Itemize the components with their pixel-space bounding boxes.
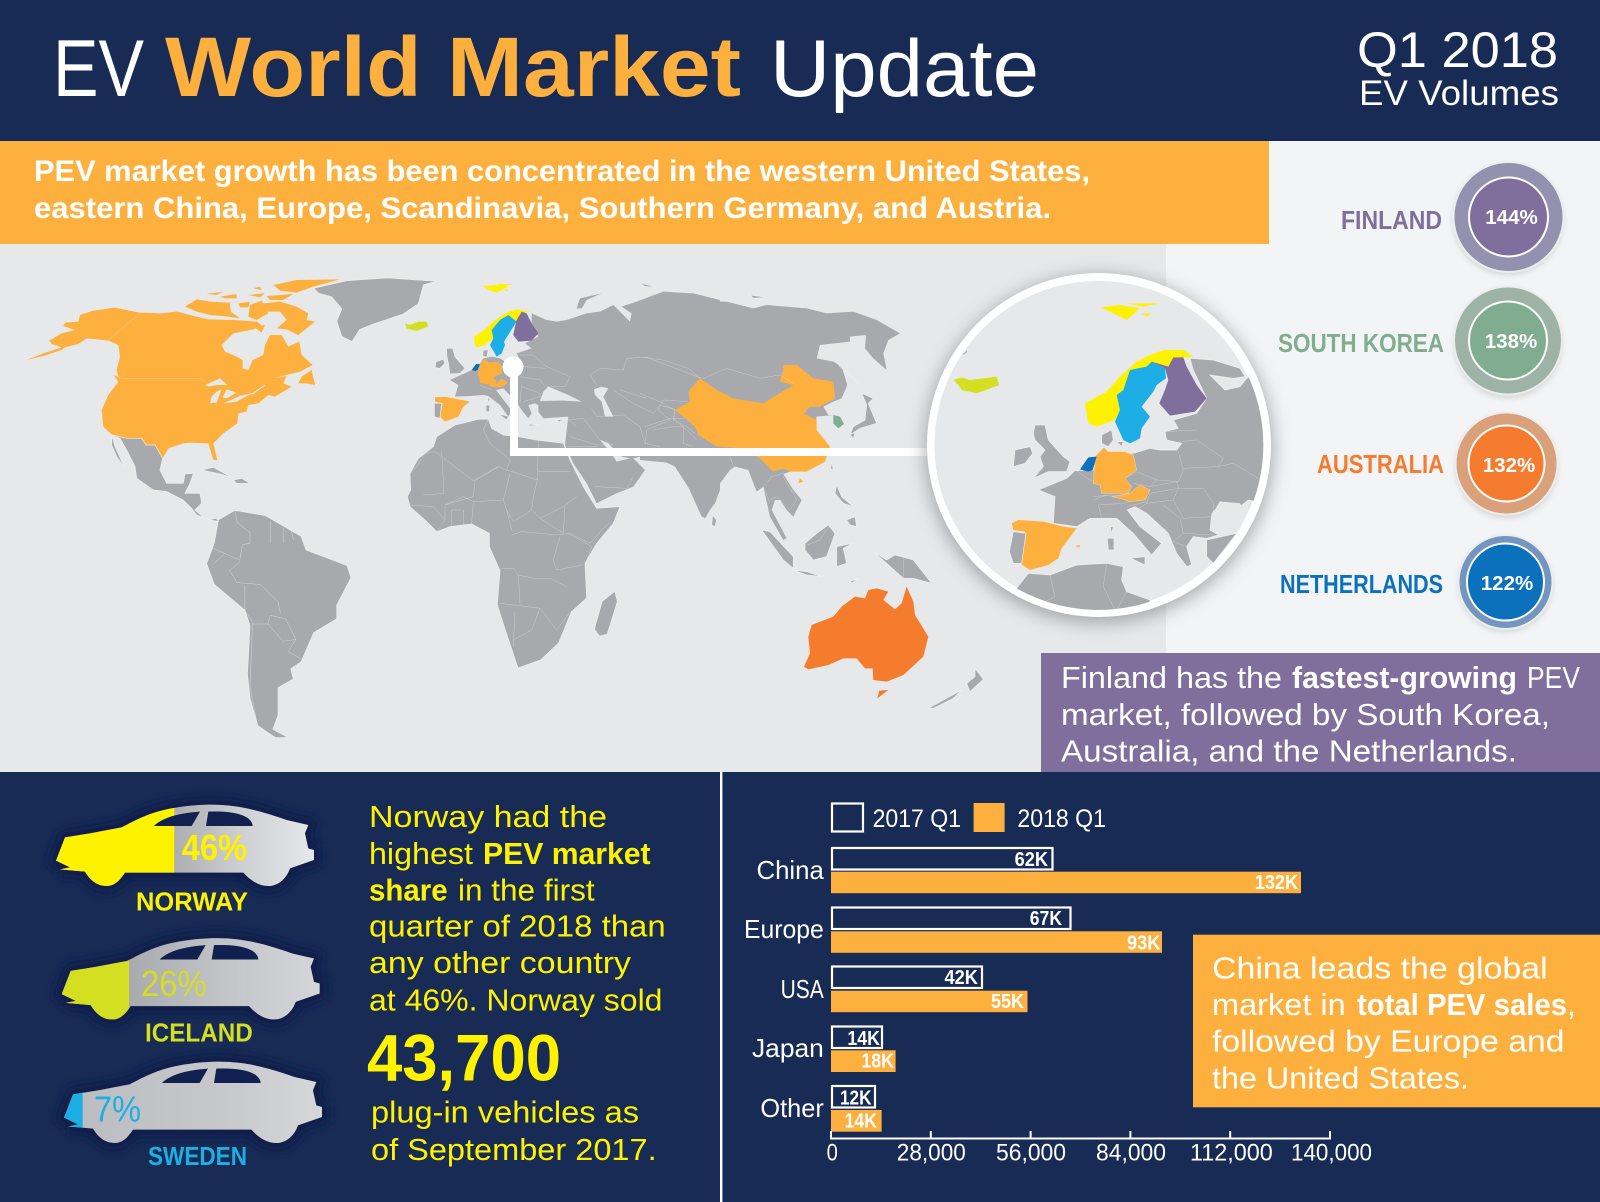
inset ring — [927, 273, 1271, 617]
x axis labels: 28,000 — [897, 1140, 966, 1167]
continental Europe — [1038, 358, 1267, 567]
Anatolia — [1207, 533, 1237, 563]
Netherlands — [472, 364, 480, 371]
South America — [207, 510, 351, 738]
car: Sweden: 7% — [94, 1089, 141, 1130]
callout: China leads global market: followed by Europe and — [1212, 1024, 1564, 1059]
Finland — [1152, 357, 1207, 416]
text block: Norway market share: Norway had the — [369, 799, 607, 834]
region labels — [744, 855, 824, 1123]
bar values: 55K — [991, 991, 1024, 1013]
bar values: 14K — [845, 1111, 877, 1133]
callout: fastest-growing market: fastest-growing — [1292, 660, 1517, 695]
Great Lakes — [205, 378, 253, 403]
arrow: connector from Europe to the inset — [502, 356, 935, 456]
world map — [27, 278, 983, 738]
big number: Norway sales: 43,700 — [367, 1021, 561, 1095]
legend: 2018 Q1 — [1017, 805, 1106, 833]
South America borders — [209, 510, 304, 726]
growth list: South Korea: 138% — [1485, 330, 1537, 353]
Europe and western Asia borders — [480, 355, 702, 488]
Black Sea — [540, 387, 582, 402]
Baja California — [112, 435, 125, 468]
growth list: South Korea — [1278, 286, 1563, 398]
callout: fastest-growing market: market, followed by South Korea, — [1061, 697, 1550, 732]
map: North America — [27, 279, 340, 522]
Iceland — [953, 377, 999, 393]
growth list: Finland: FINLAND — [1341, 205, 1442, 235]
Sweden — [1115, 362, 1166, 443]
Newfoundland — [298, 370, 315, 385]
callout: China leads global market: the United States. — [1212, 1060, 1469, 1095]
panel: market share — [0, 772, 720, 1202]
growth list: Australia — [1317, 412, 1558, 518]
Caspian Sea and Persian Gulf — [594, 387, 613, 417]
eastern Europe borders — [1075, 430, 1258, 547]
callout: China leads global market: total PEV sales — [1357, 987, 1567, 1022]
title — [53, 20, 1039, 114]
callout: China leads global market — [1193, 935, 1600, 1107]
China — [675, 365, 835, 472]
bar values: 18K — [861, 1051, 894, 1073]
Hainan — [798, 478, 803, 483]
car: Iceland: 26% — [141, 963, 207, 1004]
Norway — [474, 309, 530, 347]
callout: China leads global market: China leads the global — [1212, 950, 1548, 985]
x axis labels: 0 — [827, 1140, 838, 1167]
bar values: 14K — [847, 1028, 880, 1050]
map: Greenland, South America and Madagascar — [207, 278, 617, 738]
growth list: Australia: 132% — [1483, 454, 1535, 477]
Black Sea — [1210, 502, 1241, 526]
Austria — [487, 378, 508, 387]
map: Asia landmass — [640, 293, 900, 540]
bar values: 67K — [1030, 908, 1062, 930]
Netherlands — [1080, 457, 1097, 472]
growth list: Finland — [1341, 161, 1564, 275]
Greenland — [314, 278, 436, 342]
bar values: 42K — [944, 967, 978, 989]
Canadian Arctic islands — [185, 279, 340, 335]
Iceland — [405, 322, 428, 331]
text block: Norway market share: plug-in vehicles as — [371, 1095, 639, 1130]
Germany — [477, 359, 502, 385]
car: Iceland — [62, 938, 320, 1048]
St Lawrence river — [237, 385, 265, 398]
Eurasia west — [450, 292, 720, 518]
callout: fastest-growing market: Finland has the — [1061, 660, 1282, 695]
bars: 2017 Q1 outlines — [832, 848, 1070, 1108]
Sweden — [490, 315, 517, 357]
connector dot — [502, 356, 524, 378]
banner: market growth statement: eastern China, Europe, Scandinavia, Southern Germany, and Austria. — [34, 192, 1051, 225]
Austria — [1112, 485, 1150, 502]
callout: China leads global market: market in — [1212, 987, 1346, 1022]
region labels: Europe — [744, 914, 824, 944]
Australia — [804, 587, 928, 698]
text block: Norway market share: in the first — [458, 873, 595, 908]
panel: sales chart — [722, 772, 1600, 1202]
x axis — [831, 1131, 1330, 1138]
Denmark — [483, 350, 488, 357]
car: Norway: 46% — [182, 827, 247, 868]
subtitle: date and source: EV Volumes — [1359, 74, 1559, 113]
bar values: 132K — [1255, 872, 1299, 894]
inset countries — [953, 303, 1267, 617]
car: Sweden — [64, 1062, 322, 1171]
Great Britain and Ireland — [1013, 425, 1070, 478]
callout: China leads global market: , — [1567, 987, 1576, 1022]
growth list: Finland: 144% — [1485, 206, 1538, 229]
callout: fastest-growing market — [1041, 653, 1600, 772]
South Korea — [833, 415, 844, 428]
region labels: China — [756, 855, 824, 885]
map: Europe, Africa and western Asia — [405, 283, 720, 668]
title: EV — [53, 24, 144, 114]
car: Sweden: SWEDEN — [148, 1141, 247, 1171]
Spain — [435, 397, 470, 422]
legend: 2017 Q1 — [873, 805, 961, 833]
growth list: Netherlands: 122% — [1481, 572, 1533, 595]
Asia islands — [640, 283, 932, 583]
US and Canada borders — [108, 313, 205, 382]
connector line — [510, 360, 935, 456]
Persian Gulf — [600, 440, 630, 462]
text block: Norway market share: quarter of 2018 than — [369, 909, 666, 944]
Portugal — [434, 403, 442, 418]
x axis labels: 56,000 — [996, 1140, 1066, 1167]
growth list: Netherlands — [1280, 534, 1554, 632]
x axis labels: 84,000 — [1096, 1140, 1166, 1167]
New Zealand — [928, 668, 983, 708]
inset shadow — [925, 275, 1273, 623]
legend — [832, 803, 1106, 833]
Svalbard — [483, 284, 513, 293]
bars: 2018 Q1 filled — [831, 872, 1301, 1132]
text block: Norway market share: share — [369, 873, 448, 908]
text block: Norway market share — [367, 799, 666, 1167]
subtitle: date and source: Q1 2018 — [1357, 22, 1558, 78]
banner: market growth statement — [0, 141, 1269, 244]
Denmark — [1102, 430, 1123, 447]
panel: map background — [0, 244, 1600, 772]
Africa — [407, 419, 620, 668]
map: eastern Asia islands and China — [600, 283, 932, 583]
Madagascar — [594, 591, 617, 636]
map: Australia and New Zealand — [804, 587, 983, 708]
car: Iceland: ICELAND — [145, 1018, 253, 1048]
North Africa — [1016, 564, 1150, 610]
Mediterranean islands — [960, 348, 1145, 565]
callout: fastest-growing market: Australia, and the Netherlands. — [1061, 734, 1517, 768]
Portugal — [1009, 532, 1026, 563]
x axis labels: 140,000 — [1291, 1140, 1372, 1167]
Mediterranean islands — [486, 398, 563, 426]
Spain — [1012, 520, 1080, 570]
North Africa borders — [1045, 563, 1127, 610]
growth list: Australia: AUSTRALIA — [1317, 449, 1444, 479]
car: Norway — [56, 805, 314, 917]
growth list: Netherlands: NETHERLANDS — [1280, 569, 1443, 599]
text block: Norway market share: of September 2017. — [371, 1132, 657, 1167]
Svalbard — [1101, 303, 1160, 320]
car: Norway: NORWAY — [136, 887, 248, 917]
inset map: Europe zoom circle — [925, 273, 1273, 623]
subtitle: date and source — [1357, 22, 1559, 113]
bar chart: PEV sales by region — [744, 803, 1372, 1167]
header bar — [0, 0, 1600, 141]
bar values — [840, 849, 1299, 1133]
bar values: 12K — [840, 1087, 872, 1109]
text block: Norway market share: any other country — [369, 945, 632, 980]
divider between bottom panels — [720, 772, 722, 1202]
text block: Norway market share: at 46%. Norway sold — [369, 983, 662, 1018]
Britain and Ireland — [435, 348, 465, 374]
Finland — [513, 312, 538, 342]
Novaya Zemlya — [577, 283, 653, 308]
Germany — [1093, 447, 1137, 493]
banner: market growth statement: PEV market growth has been concentrated in the western United States, — [34, 155, 1090, 188]
panel: right growth panel background — [1166, 141, 1600, 772]
region labels: Japan — [752, 1033, 824, 1063]
x axis labels: 112,000 — [1190, 1140, 1273, 1167]
text block: Norway market share: highest — [369, 836, 473, 871]
Africa borders — [410, 419, 610, 647]
callout: fastest-growing market: PEV — [1527, 660, 1580, 695]
bar values: 62K — [1015, 849, 1048, 871]
Mexico and Central America — [112, 435, 218, 522]
bar values: 93K — [1127, 932, 1161, 954]
Asia borders — [640, 357, 904, 578]
Norway — [1085, 350, 1193, 427]
region labels: Other — [760, 1093, 824, 1123]
x axis labels — [827, 1140, 1372, 1167]
title: World Market — [165, 20, 741, 114]
Canada and USA mainland — [27, 308, 313, 460]
region labels: USA — [781, 974, 824, 1004]
growth list: South Korea: SOUTH KOREA — [1278, 328, 1444, 358]
title: Update — [770, 24, 1039, 114]
text block: Norway market share: PEV market — [483, 836, 651, 871]
Caribbean islands — [202, 467, 250, 483]
